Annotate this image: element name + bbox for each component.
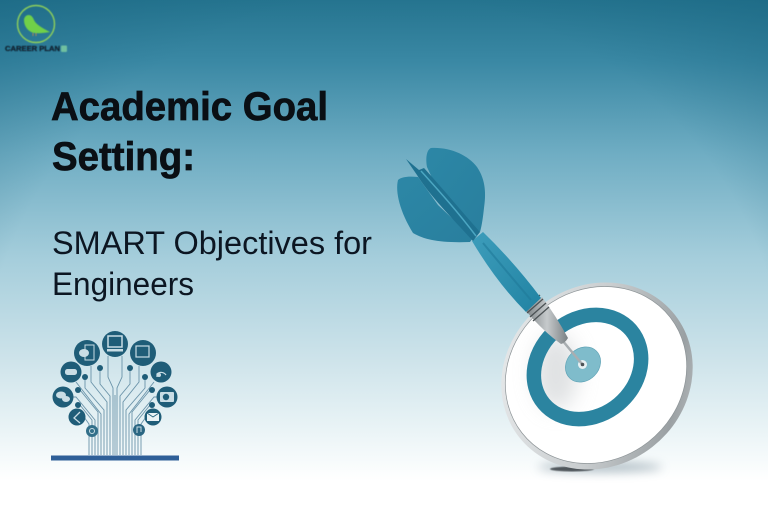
dart tip (562, 340, 582, 364)
subtitle: SMART Objectives for (52, 225, 372, 261)
technology tree icon (51, 331, 179, 460)
bullseye center (578, 360, 587, 369)
barrel grooves (524, 295, 549, 321)
title: Setting: (52, 135, 195, 179)
shaft shading (483, 243, 531, 300)
bullseye (558, 340, 608, 389)
logo wordmark: CAREER PLAN (5, 44, 60, 53)
logo: Career Plan B (5, 6, 67, 53)
tree circle icons (52, 331, 178, 437)
shading on the face (534, 334, 578, 410)
target board (464, 244, 730, 508)
subtitle (52, 225, 372, 302)
flight back fin (426, 148, 485, 232)
tree circuit branches (72, 356, 158, 455)
title (51, 85, 328, 179)
blue shaft (472, 232, 541, 312)
outer silver rim (464, 244, 730, 508)
small glyphs inside circles (56, 336, 174, 434)
blue ring (513, 293, 662, 441)
icon: green bird (24, 15, 50, 36)
flight central fin (406, 159, 480, 241)
white face (470, 250, 722, 500)
flight left fin (397, 177, 473, 242)
tree base bar (51, 456, 179, 460)
target shadow (538, 462, 662, 472)
metal barrel (526, 297, 568, 344)
subtitle: Engineers (52, 266, 194, 302)
dart (397, 148, 584, 366)
target contact shadow (550, 466, 594, 472)
central fin highlight (421, 171, 476, 236)
title: Academic Goal (51, 85, 328, 129)
dart point (581, 363, 584, 366)
